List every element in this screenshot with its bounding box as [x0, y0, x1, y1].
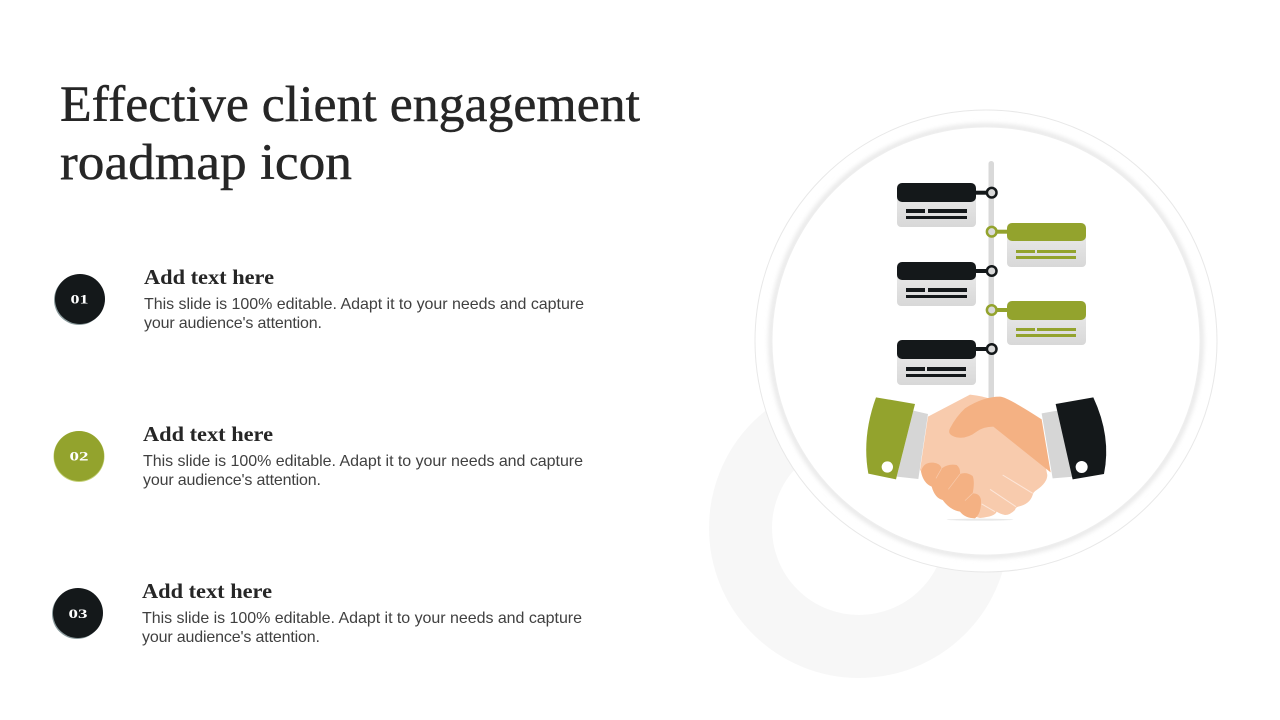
left green sleeve — [866, 397, 915, 479]
milestone card 2 — [987, 223, 1086, 267]
body 03: your audience's attention. — [142, 629, 320, 646]
fingers — [921, 463, 981, 518]
roadmap timeline — [897, 161, 1086, 401]
badge 02: 02 — [70, 450, 88, 464]
body 02: This slide is 100% editable. Adapt it to your needs and capture — [143, 453, 583, 470]
inner circle — [771, 126, 1201, 556]
milestone card 1 — [897, 183, 996, 227]
right shirt cuff — [1042, 411, 1074, 478]
badge 03 — [52, 588, 103, 639]
milestone card 3 — [897, 262, 996, 306]
body 03 — [142, 610, 582, 646]
light hand — [920, 395, 1047, 518]
left shirt cuff — [897, 411, 928, 479]
body 02: your audience's attention. — [143, 472, 321, 489]
body 03: This slide is 100% editable. Adapt it to your needs and capture — [142, 610, 582, 627]
title: Effective client engagement — [60, 77, 640, 133]
item 03 — [52, 579, 582, 646]
title: roadmap icon — [60, 135, 352, 191]
badge 01: 01 — [70, 292, 88, 306]
body 01 — [144, 296, 584, 332]
finger creases — [936, 468, 1033, 512]
heading 03: Add text here — [142, 579, 272, 603]
hand shadow — [947, 519, 1013, 521]
item 02 — [54, 422, 583, 489]
milestone card 4 — [987, 301, 1086, 345]
badge 01 — [54, 274, 105, 325]
timeline spine — [988, 161, 994, 401]
body 02 — [143, 453, 583, 489]
badge 02 — [54, 431, 104, 482]
outer circle — [755, 110, 1217, 572]
milestone card 5 — [897, 340, 996, 385]
title — [60, 77, 640, 191]
dark hand — [949, 397, 1051, 472]
body 01: This slide is 100% editable. Adapt it to your needs and capture — [144, 296, 584, 313]
background ring — [740, 410, 978, 646]
item 01 — [54, 265, 584, 332]
badge 03: 03 — [68, 607, 88, 621]
heading 02: Add text here — [143, 422, 273, 446]
icon: handshake — [866, 395, 1106, 521]
right black sleeve — [1056, 397, 1106, 479]
heading 01: Add text here — [144, 265, 274, 289]
body 01: your audience's attention. — [144, 315, 322, 332]
